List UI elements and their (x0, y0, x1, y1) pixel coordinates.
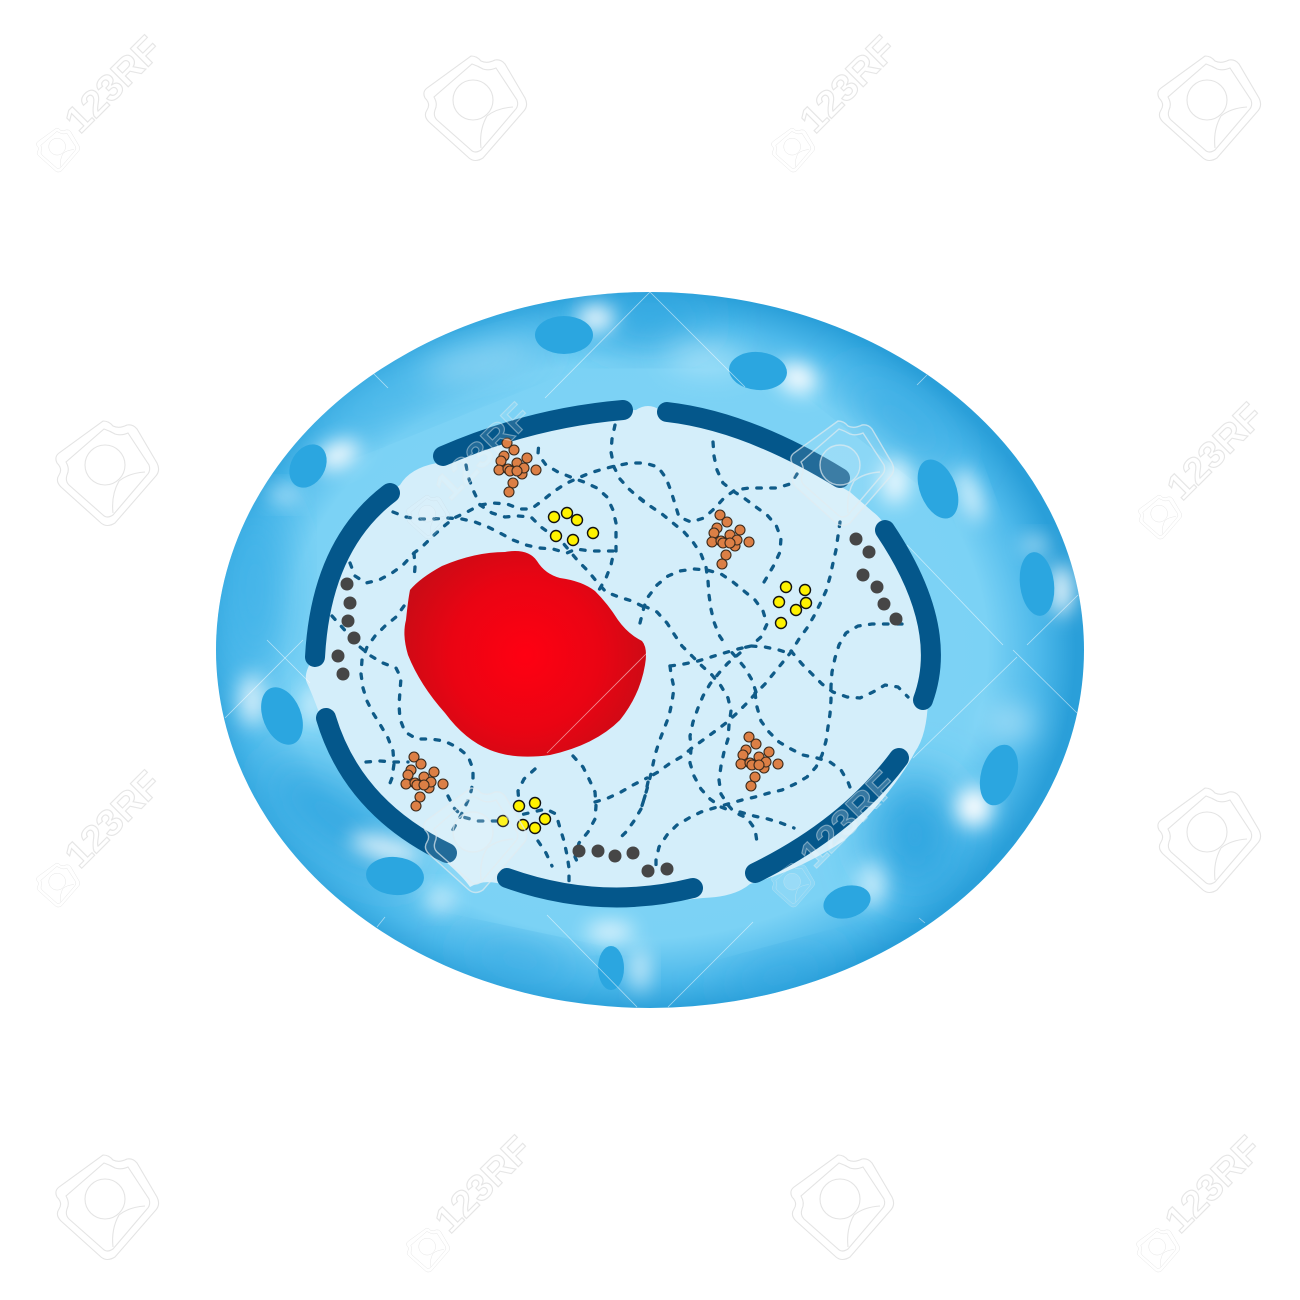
nucleoplasm: pale blue interior (306, 406, 928, 902)
watermark: top right logo (1158, 56, 1261, 160)
watermark: over cell lower right (772, 763, 904, 907)
watermark: top left: 123RF (57, 28, 169, 141)
watermark: bottom centre: 123RF (427, 1128, 539, 1241)
watermark: lower left (37, 763, 169, 907)
watermark: over cell upper right logo (791, 421, 894, 526)
watermark: bottom logo (791, 1155, 894, 1260)
chromatin: dashed network (332, 425, 908, 881)
watermark: lower left: 123RF (57, 763, 169, 876)
watermark: left logo (56, 421, 159, 526)
granules: brown cluster top (494, 438, 541, 497)
granules: brown cluster lower right (736, 732, 783, 791)
nucleolus: red body (404, 551, 646, 757)
watermark: top logo (424, 56, 527, 160)
watermark: bottom right (1137, 1128, 1269, 1272)
watermark: top centre right: 123RF (792, 28, 904, 141)
nuclear membrane: segmented envelope (315, 410, 931, 897)
granules: yellow cluster right (774, 582, 812, 628)
granules: brown cluster lower left (401, 752, 448, 811)
watermark: over cell lower left logo (424, 788, 527, 892)
granules: grey chain bottom (572, 844, 674, 878)
watermark: right (1139, 395, 1271, 539)
watermark: bottom left logo (56, 1155, 159, 1260)
granules: yellow cluster bottom (498, 798, 550, 834)
watermark: over cell upper left (407, 395, 539, 539)
watermark: bottom centre (407, 1128, 539, 1272)
watermark: right: 123RF (1159, 395, 1271, 508)
granules: brown cluster upper right (707, 510, 754, 569)
watermark: lower right logo (1158, 788, 1261, 892)
watermark: top left (37, 28, 169, 172)
watermark: over cell lower right: 123RF (792, 763, 904, 876)
watermark: top centre right (772, 28, 904, 172)
granules: grey chain left (332, 578, 360, 680)
watermark: over cell upper left: 123RF (427, 395, 539, 508)
granules: grey chain right (850, 532, 902, 626)
granules: yellow cluster top (548, 508, 598, 546)
organelles: cytoplasm vesicles (253, 316, 1058, 990)
cytoplasm: blue cell body (216, 292, 1084, 1008)
watermark: bottom right: 123RF (1157, 1128, 1269, 1241)
